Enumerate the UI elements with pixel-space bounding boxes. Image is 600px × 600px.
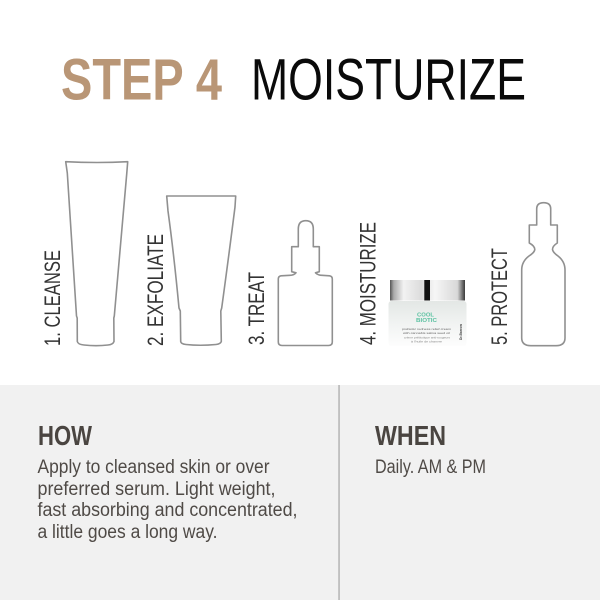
icon: cool biotic cream jar: COOL	[417, 312, 434, 318]
step 4: moisturize	[356, 222, 466, 346]
heading: how: HOW	[38, 420, 92, 451]
text block: when schedule: Daily. AM & PM	[375, 457, 486, 478]
label: 3. treat: 3. TREAT	[244, 272, 269, 345]
icon: cool biotic cream jar: Dr.Barrow	[459, 324, 463, 340]
heading: when: WHEN	[375, 420, 446, 451]
label: 1. cleanse: 1. CLEANSE	[40, 250, 65, 346]
title	[61, 48, 526, 112]
icon: cool biotic cream jar	[388, 280, 466, 346]
icon: sunscreen dropper bottle	[522, 203, 565, 346]
icon: cleanser tube	[66, 162, 128, 346]
title: STEP 4	[61, 48, 222, 112]
step 1: cleanse	[40, 162, 128, 346]
label: 5. protect: 5. PROTECT	[487, 248, 512, 345]
panel: how and when	[0, 385, 600, 600]
step 5: protect	[487, 203, 565, 346]
step 3: treat	[244, 221, 332, 346]
text block: how instructions: Apply to cleansed skin or over	[38, 457, 270, 478]
icon: cool biotic cream jar: BIOTIC	[416, 318, 437, 324]
icon: cool biotic cream jar: crème prébiotique anti-rougeurs	[404, 336, 451, 340]
text block: how instructions: fast absorbing and concentrated,	[38, 500, 298, 521]
icon: serum dropper bottle	[278, 221, 332, 346]
text block: how instructions	[38, 457, 298, 543]
icon: cool biotic cream jar: prebiotic redness relief cream	[402, 327, 452, 331]
step 2: exfoliate	[143, 196, 236, 346]
text block: how instructions: a little goes a long way.	[38, 522, 218, 543]
icon: exfoliant tube	[167, 196, 236, 345]
label: 2. exfoliate: 2. EXFOLIATE	[143, 234, 168, 346]
panel: when	[375, 420, 486, 478]
label: 4. moisturize: 4. MOISTURIZE	[356, 222, 380, 345]
icon: cool biotic cream jar: with cannabis sativa seed oil	[403, 331, 450, 335]
text block: how instructions: preferred serum. Light weight,	[38, 479, 276, 500]
panel: how	[38, 420, 298, 543]
icon: cool biotic cream jar: à l'huile de chanvre	[411, 340, 442, 344]
